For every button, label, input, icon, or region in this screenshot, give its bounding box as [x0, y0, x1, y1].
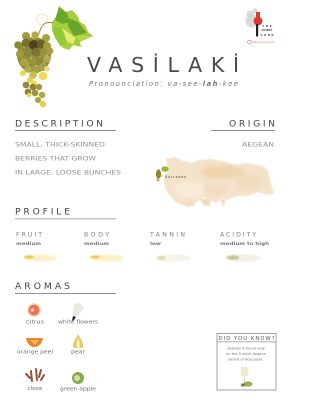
icon: wine glass and grapes	[240, 367, 252, 387]
description text: IN LARGE, LOOSE BUNCHES	[15, 170, 121, 176]
callout text: on the Turkish Aegean	[226, 352, 266, 356]
origin heading: ORIGIN	[229, 118, 275, 130]
profile: fruit: medium	[16, 241, 41, 247]
map lower fragments	[180, 198, 226, 207]
profile: fruit	[16, 232, 57, 261]
callout heading: DID YOU KNOW?	[218, 336, 275, 342]
icon: white flowers	[72, 303, 84, 321]
panel: profile	[15, 207, 269, 262]
origin text: AEGEAN	[242, 143, 274, 149]
profile: body	[84, 232, 124, 261]
label: pear: pear	[71, 350, 86, 356]
profile: acidity	[220, 232, 269, 262]
logo: The Quirky Cork: thequirkycork.com	[252, 40, 274, 44]
logo: The Quirky Cork	[246, 8, 274, 44]
berries	[14, 31, 53, 107]
label: white flowers: white flowers	[58, 320, 98, 326]
icon: pear	[73, 334, 83, 348]
icon: green apple	[72, 372, 84, 384]
logo wordmark: QUIRKY	[262, 28, 273, 32]
map marker: Bozcaada	[156, 166, 169, 182]
profile: tannin	[149, 232, 191, 262]
callout text: Island of Bozcaada.	[228, 358, 264, 362]
stem and tendril	[38, 22, 53, 36]
panel: description	[15, 118, 121, 176]
profile: tannin: low	[150, 241, 162, 247]
label: green apple: green apple	[60, 386, 96, 392]
logo website	[248, 40, 251, 44]
aromas heading: AROMAS	[15, 281, 70, 292]
title: VASİLAKİ	[87, 52, 239, 77]
callout text	[226, 346, 266, 362]
panel: aromas	[15, 281, 116, 392]
pronunciation: Pronounciation: va-see-lah-kee	[89, 80, 238, 88]
profile: tannin: TANNIN	[149, 232, 185, 239]
panel: origin	[156, 118, 275, 207]
profile heading: PROFILE	[15, 207, 70, 218]
illustration: grape cluster with leaf	[14, 6, 93, 107]
icon: orange peel	[26, 338, 43, 347]
logo wordmark	[260, 24, 274, 37]
profile: body: BODY	[84, 232, 109, 239]
profile: acidity: ACIDITY	[220, 232, 256, 239]
label: orange peel: orange peel	[17, 350, 53, 356]
map label: Bozcaada	[165, 175, 186, 179]
callout text: Vasilaki is found only	[227, 346, 266, 350]
profile: body: medium	[84, 241, 109, 247]
description text	[15, 143, 121, 176]
berry highlights	[23, 37, 48, 67]
description heading: DESCRIPTION	[15, 118, 103, 130]
description text: BERRIES THAT GROW	[15, 157, 96, 163]
logo tree	[246, 8, 262, 27]
label: clove: clove	[28, 386, 42, 392]
leaf	[52, 6, 93, 50]
label: citrus: citrus	[26, 320, 44, 326]
profile: acidity: medium to high	[220, 241, 269, 247]
icon: citrus	[27, 303, 41, 317]
logo wordmark: CORK	[260, 33, 274, 37]
logo wordmark: THE	[262, 24, 272, 28]
callout: did you know	[217, 334, 276, 390]
icon: clove	[26, 369, 44, 381]
profile: fruit: FRUIT	[16, 232, 42, 239]
description text: SMALL, THICK-SKINNED	[15, 143, 106, 149]
